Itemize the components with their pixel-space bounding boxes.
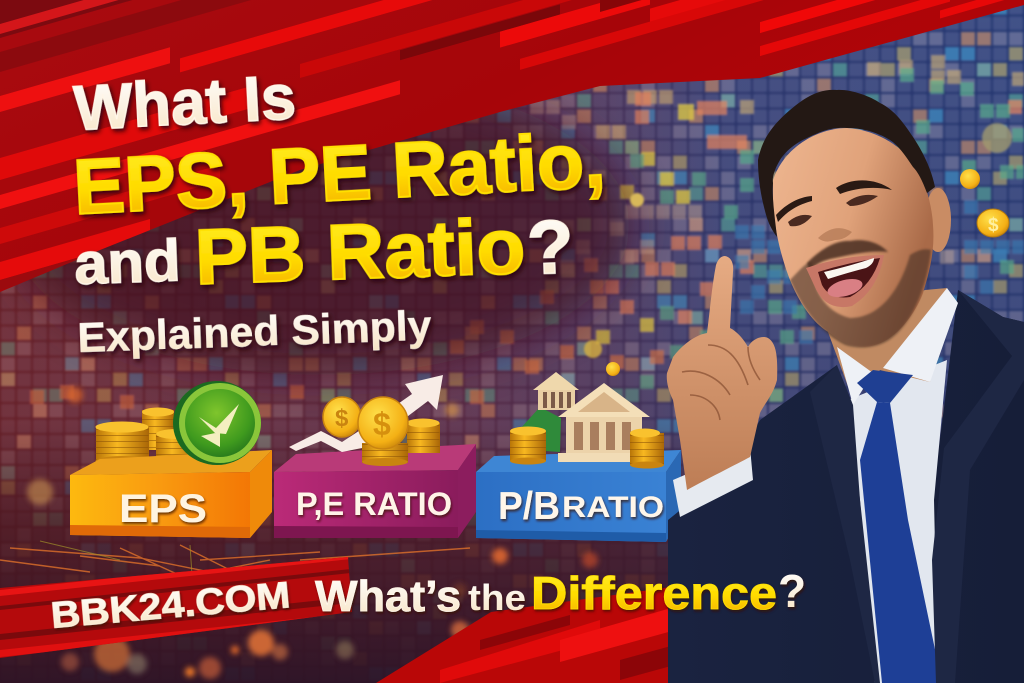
subtitle: Explained Simply xyxy=(77,302,433,361)
block top and faces xyxy=(476,450,681,472)
jacket xyxy=(668,290,1024,683)
eyebrows xyxy=(776,180,892,222)
tagline: What's the Difference?: the xyxy=(468,577,526,618)
title: line 2: EPS, PE Ratio, xyxy=(71,115,607,231)
hand with pointing finger xyxy=(667,256,777,490)
icon: cash xyxy=(519,407,561,452)
face xyxy=(773,128,933,347)
tagline: What's the Difference?: What’s xyxy=(315,572,461,621)
coin stacks xyxy=(96,408,196,466)
block top and faces xyxy=(70,450,272,475)
shirt cuff xyxy=(673,447,753,517)
block: P/B ratio xyxy=(476,340,681,542)
ribbon: BBK24.COM xyxy=(0,557,352,658)
mouth xyxy=(806,255,884,307)
tie xyxy=(857,370,942,683)
floating coins and bokeh, right: $ xyxy=(988,215,999,236)
icon: big bank xyxy=(558,383,650,462)
beard xyxy=(790,249,931,348)
title: question mark: ? xyxy=(526,204,575,291)
coin stacks xyxy=(510,340,664,468)
red streak band: bottom right xyxy=(376,588,668,683)
coin stacks and coins: $ xyxy=(335,405,349,432)
presenter xyxy=(667,90,1024,683)
label: P/B xyxy=(498,485,560,528)
ribbon text: BBK24.COM xyxy=(49,574,292,636)
neck xyxy=(828,288,947,400)
eyes xyxy=(788,195,878,226)
block: P/E ratio xyxy=(274,375,476,538)
ear xyxy=(925,188,951,252)
icon: green check badge xyxy=(173,381,261,465)
collar xyxy=(837,288,958,405)
tagline: What's the Difference?: ? xyxy=(778,565,806,617)
label: EPS xyxy=(119,487,207,531)
moustache xyxy=(807,240,888,272)
block top and faces xyxy=(274,444,476,472)
tagline: What's the Difference?: Difference xyxy=(531,567,777,619)
coin stacks and coins: $ xyxy=(373,406,391,442)
hair xyxy=(758,90,935,237)
title xyxy=(71,62,607,361)
icon: rising arrow xyxy=(289,375,443,452)
nose xyxy=(818,228,852,242)
tagline: What's the Difference? xyxy=(315,565,806,621)
icon: small bank xyxy=(533,372,579,410)
red streak band: top xyxy=(0,0,1024,300)
block: EPS xyxy=(70,381,272,538)
title: line 3 yellow: PB Ratio xyxy=(194,202,526,301)
coin stacks and coins xyxy=(323,397,440,466)
bokeh lights and bottom sparks xyxy=(0,387,598,679)
dark glow behind title xyxy=(10,75,630,375)
fist creases xyxy=(682,345,760,420)
floating coins and bokeh, right xyxy=(630,123,1012,237)
title: line 3 left: and xyxy=(73,228,181,297)
shirt xyxy=(848,360,947,683)
title: line 1: What Is xyxy=(72,62,297,144)
jacket lapels xyxy=(810,290,1024,683)
label: P,E RATIO xyxy=(296,486,452,522)
label word: RATIO xyxy=(562,491,664,524)
